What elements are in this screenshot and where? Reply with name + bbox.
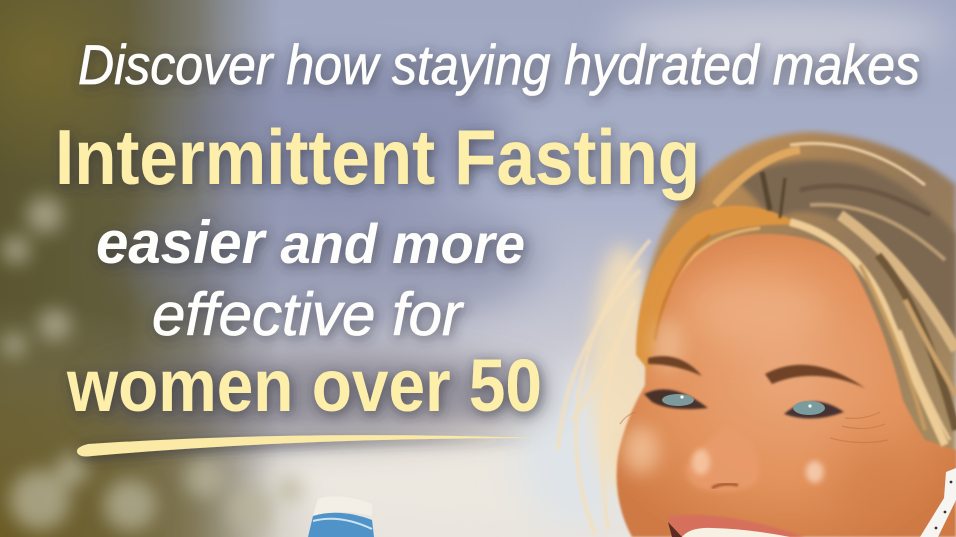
hair mass xyxy=(640,132,956,470)
earbud xyxy=(920,468,956,537)
wrinkles xyxy=(620,412,888,443)
headline text xyxy=(55,33,920,456)
wispy backlit hair xyxy=(558,240,650,535)
subheading line 1: easier and more xyxy=(96,209,525,276)
eyebrows xyxy=(648,356,865,388)
main heading: Intermittent Fasting xyxy=(55,113,700,201)
hand-drawn underline xyxy=(77,435,534,456)
forehead highlight xyxy=(685,274,825,346)
subheading line 2: effective for xyxy=(152,281,464,348)
mouth xyxy=(667,515,805,537)
eyes xyxy=(620,389,888,443)
woman portrait xyxy=(558,132,956,537)
bokeh highlights xyxy=(2,197,304,532)
audience line: women over 50 xyxy=(66,344,542,427)
hair strands xyxy=(655,143,956,445)
orange hairline band xyxy=(636,206,800,372)
nose xyxy=(686,425,759,492)
water bottle cap xyxy=(308,496,374,537)
face xyxy=(617,234,956,537)
